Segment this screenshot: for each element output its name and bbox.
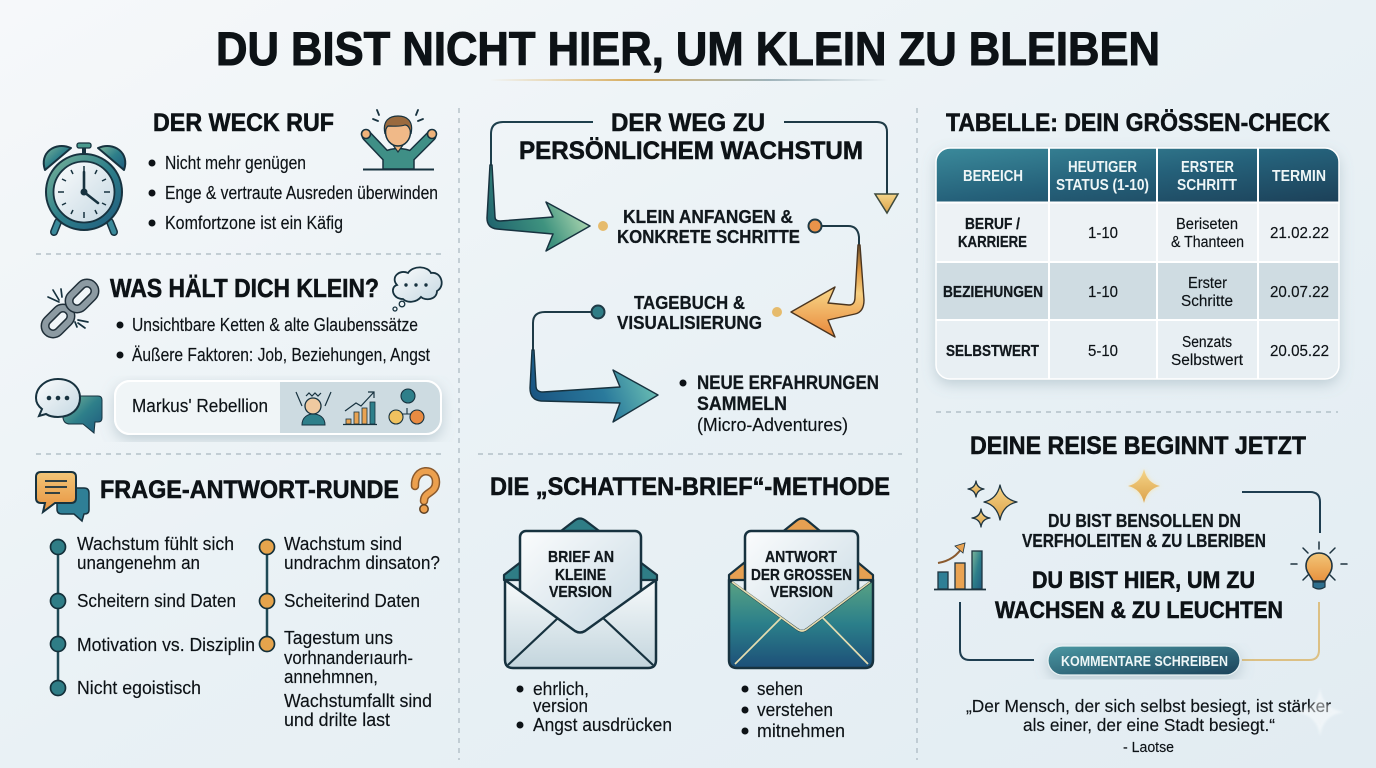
timeline: left: Wachstum fühlt sich	[77, 534, 234, 554]
title: DU BIST NICHT HIER, UM KLEIN ZU BLEIBEN	[216, 22, 1160, 75]
arrow: gold down	[784, 122, 898, 213]
list: small version: version	[533, 696, 588, 716]
timeline: left: Nicht egoistisch	[77, 678, 201, 698]
icon: growth bars	[934, 543, 986, 590]
icon: alarm clock	[44, 143, 125, 232]
table: BEREICH	[963, 168, 1023, 185]
panel: Tabelle	[936, 108, 1339, 379]
bullet list: Unsichtbare Ketten & alte Glaubenssätze	[132, 315, 418, 335]
icon: light envelope: VERSION	[549, 584, 612, 601]
panel: Frage-Antwort-Runde	[36, 471, 440, 730]
key message	[995, 567, 1283, 624]
timeline: right	[260, 534, 440, 730]
timeline: left	[50, 534, 255, 698]
icon: light bulb	[1291, 542, 1347, 589]
table: 21.02.22	[1270, 225, 1329, 242]
icon: speech bubbles	[36, 379, 102, 433]
heading: TABELLE: DEIN GRÖSSEN-CHECK	[946, 108, 1330, 137]
icon: dark envelope: VERSION	[770, 584, 833, 601]
list: big version: mitnehmen	[757, 721, 845, 741]
quote: „Der Mensch, der sich selbst besiegt, ist stärker	[966, 696, 1331, 716]
list: big version	[742, 679, 845, 741]
heading: FRAGE-ANTWORT-RUNDE	[100, 476, 399, 504]
step: Klein anfangen: KONKRETE SCHRITTE	[617, 227, 800, 247]
table: Erster	[1188, 275, 1227, 292]
table: 20.07.22	[1270, 284, 1329, 301]
button	[1048, 646, 1240, 675]
heading: DER WEG ZU	[611, 109, 765, 137]
icon: light envelope	[504, 518, 657, 668]
icon: dark envelope: DER GROSSEN	[751, 567, 852, 584]
text block: DU BIST BENSOLLEN DN	[1048, 511, 1241, 531]
step: Klein anfangen: KLEIN ANFANGEN &	[623, 207, 793, 227]
list: big version: sehen	[757, 679, 803, 699]
list: small version: ehrlich,	[533, 679, 589, 699]
panel: Was hält dich klein	[36, 267, 442, 434]
table: 5-10	[1088, 343, 1118, 360]
table	[936, 148, 1339, 379]
text block: VERFHOLEITEN & ZU LBERIBEN	[1022, 531, 1266, 551]
step: Neue Erfahrungen	[680, 373, 879, 435]
heading: DEINE REISE BEGINNT JETZT	[970, 432, 1306, 460]
step: Neue Erfahrungen: NEUE ERFAHRUNGEN	[697, 373, 879, 394]
list: small version: Angst ausdrücken	[533, 715, 672, 735]
icon: growth chart	[343, 392, 377, 424]
arrow: blue	[530, 312, 658, 422]
list: small version	[516, 679, 672, 735]
table: Senzats	[1182, 334, 1232, 351]
table: KARRIERE	[958, 234, 1027, 251]
heading: PERSÖNLICHEM WACHSTUM	[519, 136, 863, 165]
panel: Deine Reise beginnt jetzt	[934, 432, 1347, 756]
key message: WACHSEN & ZU LEUCHTEN	[995, 597, 1283, 624]
timeline: right: undrachm dinsaton?	[284, 553, 440, 573]
quote	[966, 696, 1331, 756]
icon: person with crown	[296, 392, 331, 425]
timeline: right: und drilte last	[284, 710, 390, 730]
text block	[1022, 511, 1266, 551]
step: Klein anfangen	[598, 207, 822, 247]
callout: Markus' Rebellion	[115, 381, 441, 434]
table: Selbstwert	[1171, 352, 1244, 369]
icon: dark envelope	[729, 518, 873, 668]
timeline: left: Motivation vs. Disziplin	[77, 635, 255, 655]
table: STATUS (1-10)	[1056, 177, 1149, 194]
step: Tagebuch: VISUALISIERUNG	[617, 313, 762, 333]
heading: Was hält dich klein: WAS HÄLT DICH KLEIN?	[110, 273, 379, 303]
table: BEZIEHUNGEN	[943, 284, 1043, 301]
icon: light envelope: KLEINE	[555, 567, 606, 584]
icon: chain	[42, 280, 98, 337]
heading	[519, 109, 863, 165]
icon: question mark	[415, 471, 436, 513]
icon: org tree	[389, 389, 424, 424]
timeline: left: Scheitern sind Daten	[77, 591, 236, 611]
table: & Thanteen	[1171, 234, 1244, 251]
icon: light envelope: BRIEF AN	[548, 549, 614, 566]
table: SCHRITT	[1177, 177, 1237, 194]
icon: watermark star	[1296, 688, 1344, 736]
frame lines	[960, 492, 1320, 660]
step: Tagebuch: TAGEBUCH &	[634, 293, 745, 313]
table: BERUF /	[965, 216, 1021, 233]
bullet list	[148, 153, 438, 233]
table: Schritte	[1181, 293, 1233, 310]
timeline: right: Tagestum uns	[284, 628, 393, 648]
bullet list	[116, 315, 430, 365]
bullet list: Komfortzone ist ein Käfig	[165, 213, 343, 233]
arrow: green	[487, 122, 593, 251]
table: TERMIN	[1272, 168, 1326, 185]
button: KOMMENTARE SCHREIBEN	[1061, 654, 1228, 670]
table: Beriseten	[1176, 216, 1238, 233]
step: Tagebuch	[592, 293, 782, 333]
bullet list: Enge & vertraute Ausreden überwinden	[165, 183, 438, 203]
table: 1-10	[1088, 284, 1118, 301]
list: big version: verstehen	[757, 700, 833, 720]
table: 1-10	[1088, 225, 1118, 242]
icon: chat bubbles	[36, 472, 89, 521]
quote: - Laotse	[1123, 739, 1174, 756]
icon: dark envelope: ANTWORT	[765, 549, 837, 566]
key message: DU BIST HIER, UM ZU	[1032, 567, 1255, 594]
panel: Schatten-Brief-Methode	[490, 473, 890, 741]
arrow: orange	[791, 226, 864, 337]
callout label: Markus' Rebellion	[132, 396, 268, 416]
table: HEUTIGER	[1068, 159, 1137, 176]
table: ERSTER	[1181, 159, 1234, 176]
heading: Der Weck Ruf: DER WECK RUF	[153, 109, 334, 137]
table: 20.05.22	[1270, 343, 1329, 360]
bullet list: Äußere Faktoren: Job, Beziehungen, Angst	[132, 345, 430, 365]
timeline: left: unangenehm an	[77, 553, 200, 573]
timeline: right: annehmnen,	[284, 667, 378, 687]
icon: cheering person	[362, 110, 436, 170]
timeline: right: Wachstumfallt sind	[284, 691, 432, 711]
timeline: right: Scheiterind Daten	[284, 591, 420, 611]
bullet list: Nicht mehr genügen	[165, 153, 306, 173]
panel: Der Weck Ruf	[44, 109, 438, 233]
timeline: right: Wachstum sind	[284, 534, 402, 554]
timeline: right: vorhnanderıaurh-	[284, 648, 413, 668]
heading: DIE „SCHATTEN-BRIEF“-METHODE	[490, 473, 890, 501]
icon: gold star	[1128, 469, 1160, 503]
step: Neue Erfahrungen: SAMMELN	[697, 394, 787, 415]
step: Neue Erfahrungen: (Micro-Adventures)	[697, 415, 848, 435]
icon: sparkles	[968, 481, 1017, 527]
table: SELBSTWERT	[946, 343, 1039, 360]
icon: thought cloud	[393, 267, 442, 311]
quote: als einer, der eine Stadt besiegt.“	[1023, 715, 1275, 735]
panel: Der Weg zu persönlichem Wachstum	[487, 109, 898, 435]
